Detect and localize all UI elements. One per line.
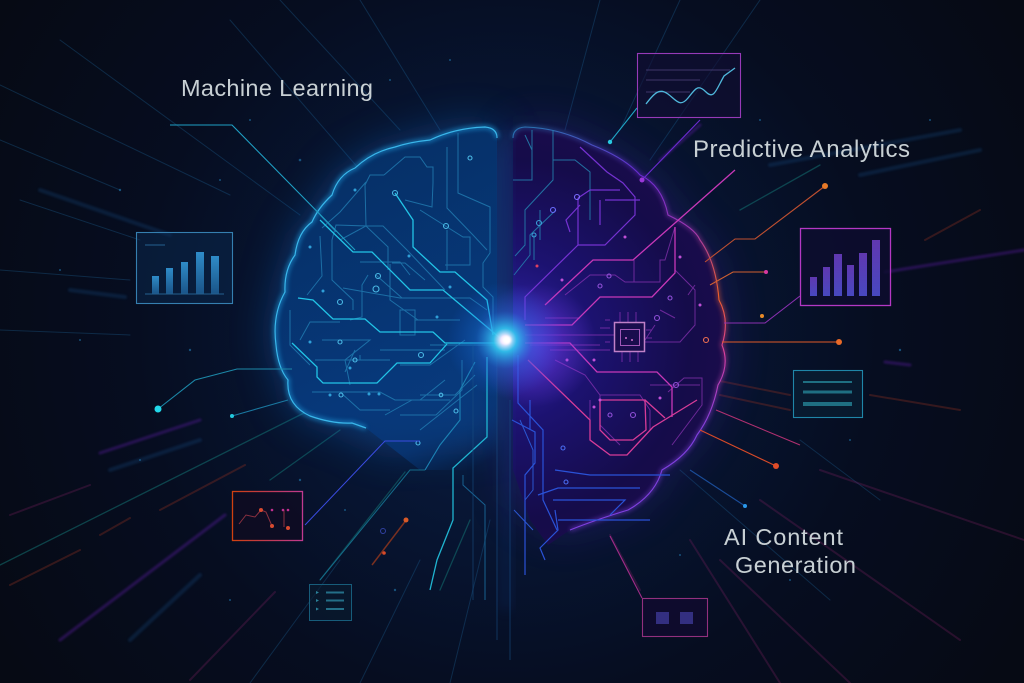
- connector lines and nodes: [158, 108, 839, 598]
- left circuit traces: dim: [290, 133, 500, 430]
- right circuit traces: dim magenta: [525, 227, 702, 445]
- left brain glow: [274, 130, 497, 446]
- right brain glow: [513, 130, 726, 532]
- panel: scatter chart red: [232, 492, 302, 540]
- right circuit traces: dim cyan: [513, 130, 590, 275]
- right circuit traces: purple: [525, 147, 640, 320]
- panel: line chart top right: [638, 54, 740, 118]
- label: Machine Learning: Machine Learning: [181, 75, 373, 101]
- label: AI Content Generation: Generation: [735, 552, 856, 578]
- left hemisphere of brain: [275, 127, 503, 470]
- centre vertical light: [500, 130, 512, 610]
- right circuit nodes: [532, 194, 708, 484]
- panel: text list right: [794, 370, 862, 418]
- label: Predictive Analytics: Predictive Analytics: [693, 136, 910, 163]
- panel: bottom box: [642, 598, 708, 636]
- right circuit traces: bright magenta: [525, 170, 735, 417]
- label: AI Content Generation: [724, 524, 856, 578]
- label: AI Content Generation: AI Content: [724, 524, 843, 550]
- left circuit traces: bright: [292, 193, 503, 383]
- scattered particles: [59, 59, 931, 601]
- panel: bar chart left: [136, 232, 232, 304]
- icon: processor chip: [614, 322, 644, 352]
- right lower blue traces: [512, 355, 670, 575]
- panel: small list: [310, 584, 352, 620]
- left circuit nodes: [338, 156, 472, 445]
- right hemisphere of brain: [512, 127, 735, 575]
- panel: bar chart right: [800, 228, 890, 306]
- centre light core: [447, 282, 597, 407]
- connector end dots: [154, 140, 842, 555]
- lower left and centre circuit traces: [305, 345, 533, 660]
